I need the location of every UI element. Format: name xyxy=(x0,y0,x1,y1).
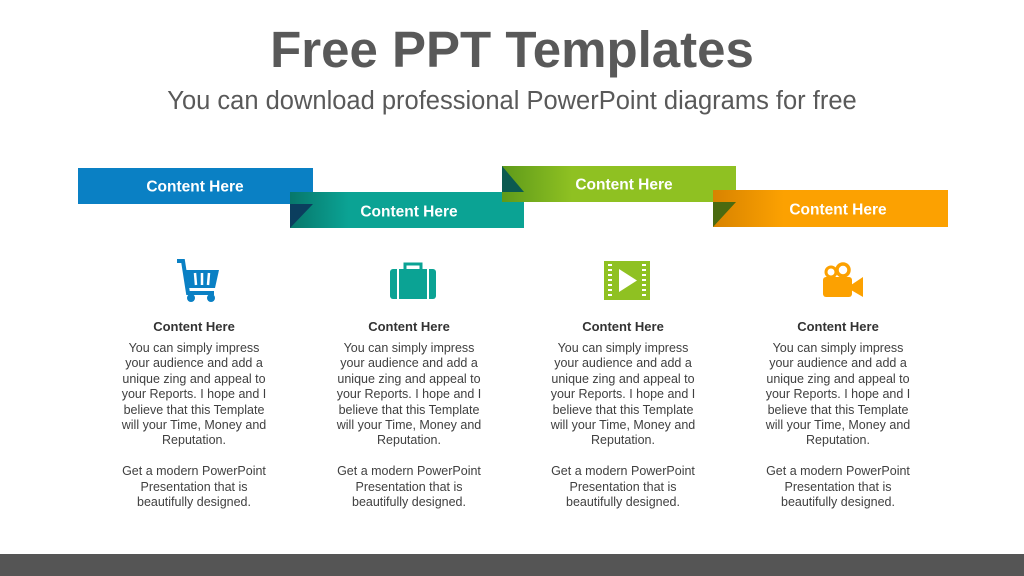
column 2 text: You can simply impress xyxy=(344,341,474,355)
column 1 text: Content Here xyxy=(153,319,235,334)
icon: video film xyxy=(604,261,650,300)
ribbon 2 xyxy=(290,192,524,228)
column 4 text: Content Here xyxy=(797,319,879,334)
column 3 text: Get a modern PowerPoint xyxy=(551,464,695,478)
column 4 text: beautifully designed. xyxy=(781,495,895,509)
ribbon 1: Content Here xyxy=(146,178,244,196)
column 3 text: believe that this Template xyxy=(553,403,693,417)
ribbon 2: Content Here xyxy=(360,204,458,220)
column 4 text: your Reports. I hope and I xyxy=(766,387,910,401)
column 3 text: Presentation that is xyxy=(569,480,676,494)
column 3 text: your audience and add a xyxy=(554,356,692,370)
column 4 text: your audience and add a xyxy=(769,356,907,370)
column 3 text: your Reports. I hope and I xyxy=(551,387,695,401)
column 3 text: unique zing and appeal to xyxy=(551,372,695,386)
column 1 text: your audience and add a xyxy=(125,356,263,370)
column 1 text xyxy=(122,319,266,509)
column 2 text: Get a modern PowerPoint xyxy=(337,464,481,478)
column 2 text: Presentation that is xyxy=(355,480,462,494)
column 2 text: beautifully designed. xyxy=(352,495,466,509)
column 4 text: believe that this Template xyxy=(768,403,908,417)
column 2 text: unique zing and appeal to xyxy=(337,372,481,386)
column 1 text: believe that this Template xyxy=(124,403,264,417)
column 4 text: Presentation that is xyxy=(784,480,892,494)
ribbon 1 xyxy=(78,168,313,204)
title: Free PPT Templates xyxy=(270,21,754,78)
column 2 text: your Reports. I hope and I xyxy=(337,387,481,401)
ribbon 4: Content Here xyxy=(789,202,887,218)
icon: briefcase xyxy=(390,262,436,299)
column 4 text: unique zing and appeal to xyxy=(766,372,910,386)
column 1 text: beautifully designed. xyxy=(137,495,251,509)
column 3 text: You can simply impress xyxy=(558,341,688,355)
ribbon 3 xyxy=(502,166,736,202)
column 1 text: will your Time, Money and xyxy=(122,418,266,432)
footer bar xyxy=(0,554,1024,576)
column 1 text: Presentation that is xyxy=(140,480,248,494)
column 2 text: believe that this Template xyxy=(339,403,479,417)
column 2 text: Content Here xyxy=(368,319,450,334)
column 4 text: Reputation. xyxy=(806,433,870,447)
column 2 text xyxy=(336,319,481,509)
column 1 text: your Reports. I hope and I xyxy=(122,387,266,401)
column 3 text: Content Here xyxy=(582,319,664,334)
column 2 text: Reputation. xyxy=(377,433,441,447)
column 3 text: will your Time, Money and xyxy=(551,418,695,432)
column 3 text xyxy=(550,319,695,509)
icon: shopping cart xyxy=(177,259,219,302)
column 2 text: will your Time, Money and xyxy=(337,418,481,432)
column 1 text: Reputation. xyxy=(162,433,226,447)
column 2 text: your audience and add a xyxy=(340,356,478,370)
column 4 text: Get a modern PowerPoint xyxy=(766,464,910,478)
column 3 text: Reputation. xyxy=(591,433,655,447)
icon: video camera xyxy=(823,262,863,297)
column 3 text: beautifully designed. xyxy=(566,495,680,509)
column 1 text: You can simply impress xyxy=(129,341,259,355)
column 4 text xyxy=(766,319,910,509)
column 4 text: You can simply impress xyxy=(773,341,903,355)
ribbon 4 xyxy=(713,190,948,227)
column 1 text: Get a modern PowerPoint xyxy=(122,464,266,478)
ribbon 3: Content Here xyxy=(575,176,673,194)
subtitle: You can download professional PowerPoint diagrams for free xyxy=(167,87,857,115)
column 1 text: unique zing and appeal to xyxy=(122,372,266,386)
column 4 text: will your Time, Money and xyxy=(766,418,910,432)
ribbon banners xyxy=(78,166,948,228)
